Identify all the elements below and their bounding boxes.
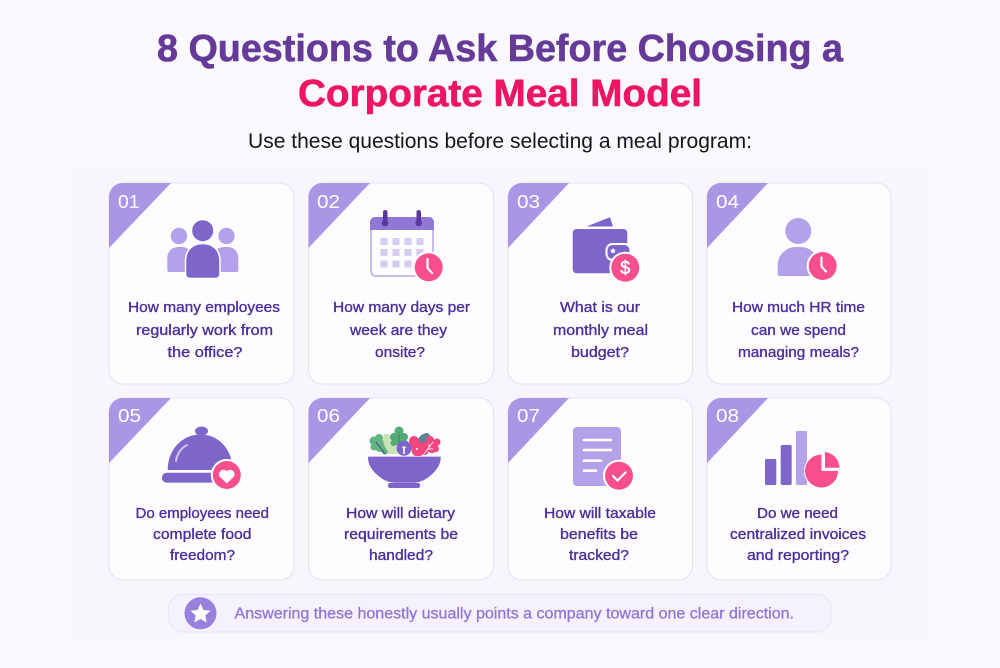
- question text: [128, 299, 280, 361]
- question text: What is our: [560, 299, 640, 316]
- icon: person with clock: [778, 218, 837, 280]
- question text: Do we need: [757, 505, 838, 522]
- question text: [136, 505, 269, 564]
- question text: [553, 299, 648, 361]
- callout: closing note: [169, 594, 831, 632]
- question text: Do employees need: [136, 505, 269, 522]
- icon: wallet with dollar coin: $: [620, 258, 630, 278]
- question text: tracked?: [569, 547, 629, 564]
- question text: managing meals?: [738, 344, 859, 361]
- icon: salad bowl: [368, 426, 441, 488]
- panel: question 06: 06: [317, 405, 340, 426]
- question text: the office?: [168, 344, 242, 361]
- question text: complete food: [153, 526, 252, 543]
- question text: How will dietary: [346, 505, 456, 522]
- panel: question 02: [308, 183, 494, 384]
- title: Corporate Meal Model: [298, 73, 702, 115]
- icon: document with check: [573, 427, 633, 490]
- panel: question 01: [109, 183, 294, 384]
- question text: requirements be: [344, 526, 458, 543]
- panel: question 02: 02: [317, 191, 340, 212]
- panel: question 08: [707, 398, 891, 580]
- icon: bar and pie chart: [765, 431, 840, 488]
- panel: question 03: 03: [517, 191, 540, 212]
- subtitle: Use these questions before selecting a meal program:: [248, 130, 752, 153]
- question text: week are they: [349, 322, 448, 339]
- panel: question 08: 08: [716, 405, 739, 426]
- title: [157, 28, 844, 115]
- panel: question 03: [508, 183, 692, 384]
- question text: and reporting?: [747, 547, 849, 564]
- panel: question 04: [707, 183, 891, 384]
- title: 8 Questions to Ask Before Choosing a: [157, 28, 844, 70]
- question text: onsite?: [375, 344, 425, 361]
- icon: calendar with clock: [370, 210, 443, 281]
- question text: How will taxable: [544, 505, 656, 522]
- question text: [732, 299, 865, 361]
- question text: [544, 505, 656, 564]
- panel: question 06: [308, 398, 494, 580]
- panel: question 05: 05: [118, 405, 141, 426]
- callout text: Answering these honestly usually points a company toward one clear direction.: [234, 606, 794, 622]
- question text: How much HR time: [732, 299, 865, 316]
- question text: regularly work from: [136, 322, 273, 339]
- panel: question 07: [508, 398, 692, 580]
- question text: monthly meal: [553, 322, 648, 339]
- icon: star badge: [184, 597, 216, 629]
- question text: benefits be: [560, 526, 638, 543]
- icon: people group: [167, 220, 238, 278]
- panel: question 05: [109, 398, 294, 580]
- question text: handled?: [369, 547, 433, 564]
- question text: freedom?: [170, 547, 235, 564]
- question text: [333, 299, 470, 361]
- panel: question 07: 07: [517, 405, 540, 426]
- question text: How many employees: [128, 299, 280, 316]
- icon: wallet with dollar coin: [573, 217, 639, 282]
- question text: [344, 505, 458, 564]
- question text: [730, 505, 866, 564]
- question text: How many days per: [333, 299, 470, 316]
- panel: question 01: 01: [118, 191, 140, 212]
- panel: question 04: 04: [716, 191, 739, 212]
- question text: budget?: [571, 344, 629, 361]
- question text: can we spend: [751, 322, 846, 339]
- question text: centralized invoices: [730, 526, 866, 543]
- icon: food cloche with heart: [162, 426, 241, 489]
